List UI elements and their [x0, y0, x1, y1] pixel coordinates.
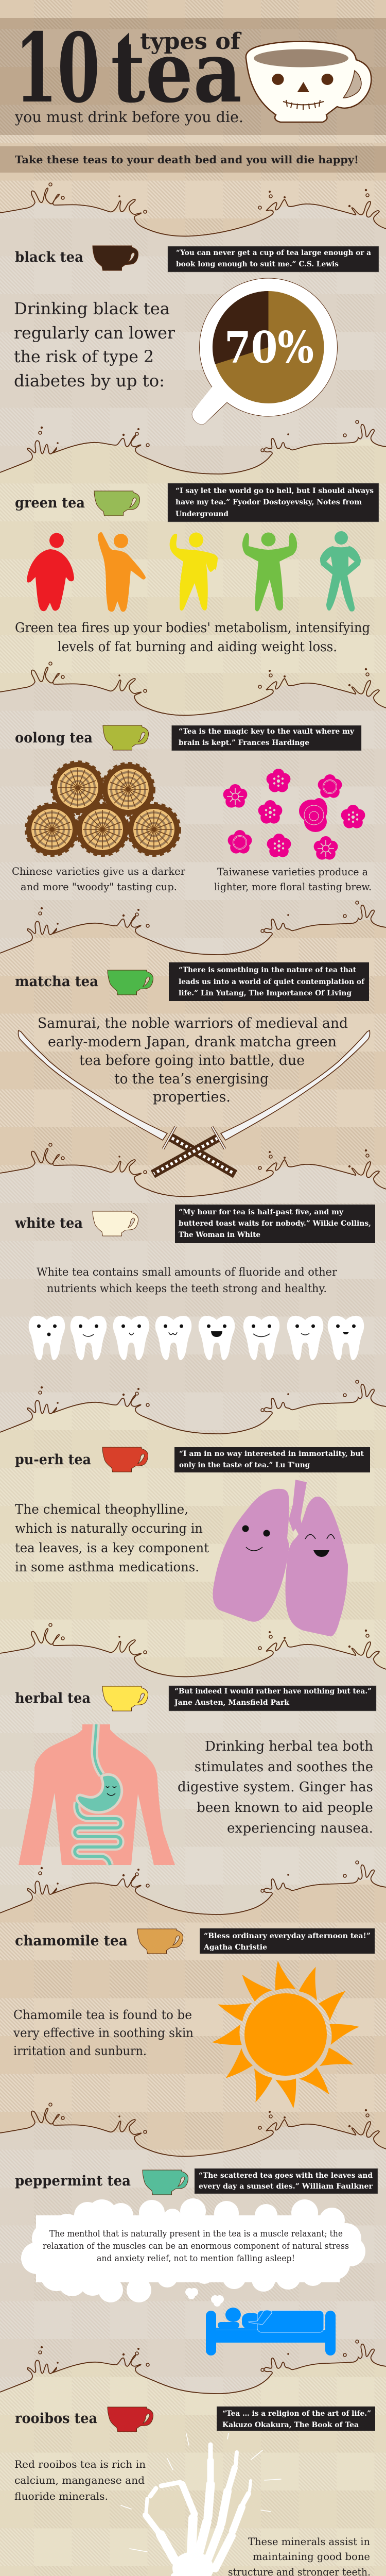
tagline: Take these teas to your death bed and you will die happy! — [15, 154, 359, 166]
body text: levels of fat burning and aiding weight loss. — [58, 639, 337, 655]
text: bones — [228, 2535, 371, 2576]
quote: life.” Lin Yutang, The Importance Of Living — [179, 989, 352, 997]
quote: “The scattered tea goes with the leaves and — [199, 2172, 373, 2180]
quote: Jane Austen, Mansfield Park — [173, 1699, 289, 1707]
heading: rooibos tea — [15, 2411, 97, 2427]
panel: herbal tea — [15, 1686, 376, 1865]
thought cloud — [21, 2198, 365, 2307]
thought cloud: and anxiety relief, not to mention falling asleep! — [97, 2253, 295, 2264]
quote: Agatha Christie — [203, 1943, 267, 1952]
quote: The Woman in White — [179, 1231, 260, 1239]
quote: only in the taste of tea.” Lu T'ung — [179, 1461, 310, 1469]
body text: tea leaves, is a key component — [15, 1540, 209, 1555]
quote: “But indeed I would rather have nothing but tea.” — [174, 1687, 372, 1696]
text: Taiwanese varieties: Taiwanese varieties produce a — [217, 866, 368, 878]
body text: irritation and sunburn. — [13, 2044, 147, 2058]
quote: every day a sunset dies.” William Faulkner — [199, 2182, 373, 2191]
icon: cup — [94, 491, 140, 516]
quote — [175, 1205, 375, 1243]
title: types of — [140, 28, 242, 55]
body text: stimulates and soothes the — [195, 1759, 373, 1775]
icon: cup — [102, 1686, 148, 1711]
thought cloud: relaxation of the muscles can be an enormous component of natural stress — [43, 2241, 349, 2251]
body text: experiencing nausea. — [227, 1821, 373, 1836]
icon: skeleton hand — [121, 2433, 281, 2576]
quote: “There is something in the nature of tea that — [179, 966, 357, 974]
body text: Drinking herbal tea both — [205, 1739, 373, 1754]
quote — [169, 1686, 376, 1711]
quote: Kakuzo Okakura, The Book of Tea — [222, 2421, 359, 2429]
icon: cup — [93, 1211, 138, 1236]
body text — [15, 1502, 209, 1574]
heading: herbal tea — [15, 1690, 91, 1706]
icon: sun — [210, 1959, 361, 2110]
quote: “Tea … is a religion of the art of life.” — [222, 2410, 371, 2418]
panel: black tea — [14, 246, 379, 425]
icon: cup — [108, 2407, 153, 2432]
body text: to the tea’s energising — [114, 1071, 269, 1087]
quote: have my tea.” Fyodor Dostoyevsky, Notes from — [176, 498, 362, 506]
heading: pu-erh tea — [15, 1452, 91, 1468]
icon: crossed katanas — [18, 1030, 370, 1174]
body text: Chamomile tea is found to be — [13, 2008, 192, 2022]
icon: smiling teeth — [29, 1316, 364, 1360]
quote: buttered toast waits for nobody.” Wilkie Collins, — [179, 1219, 371, 1228]
text: Taiwanese varieties — [214, 866, 372, 893]
panel: pu-erh tea — [15, 1447, 370, 1636]
icon: stacked logs — [26, 761, 180, 856]
icon: cup — [93, 246, 138, 270]
chart: 70% pie in a cup: 70% — [224, 322, 314, 373]
quote: leads us into a world of quiet contemplation of — [179, 978, 365, 986]
panel: chamomile tea — [13, 1928, 375, 2110]
body text: regularly can lower — [14, 323, 176, 343]
text: bones: These minerals assist in — [248, 2535, 370, 2548]
text: minerals — [14, 2458, 146, 2502]
icon: cup — [108, 970, 153, 995]
body text: nutrients which keeps the teeth strong and healthy. — [47, 1282, 327, 1295]
heading: black tea — [15, 249, 83, 265]
body text: White tea contains small amounts of fluoride and other — [37, 1266, 338, 1278]
quote — [169, 962, 369, 1001]
heading: matcha tea — [15, 974, 98, 990]
text: Taiwanese varieties: lighter, more floral tasting brew. — [214, 880, 372, 893]
body text — [13, 2008, 194, 2058]
text: bones: maintaining good bone — [253, 2550, 370, 2563]
quote: “I am in no way interested in immortality, but — [179, 1450, 364, 1458]
text: Chinese varieties: Chinese varieties give us a darker — [12, 865, 185, 877]
body text: which is naturally occuring in — [15, 1521, 203, 1536]
body text: been known to aid people — [197, 1800, 373, 1816]
quote — [195, 2168, 378, 2194]
body text: digestive system. Ginger has — [178, 1780, 373, 1795]
heading: oolong tea — [15, 730, 93, 746]
icon: cup — [102, 1447, 148, 1472]
thought cloud: The menthol that is naturally present in the tea is a muscle relaxant; the — [49, 2229, 343, 2239]
text: minerals: Red rooibos tea is rich in — [14, 2458, 146, 2470]
text: Chinese varieties — [12, 865, 185, 893]
body text — [15, 620, 370, 655]
body text — [38, 1015, 348, 1105]
icon: torso with digestive system — [19, 1724, 175, 1865]
body text — [37, 1266, 338, 1295]
heading: white tea — [14, 1215, 83, 1231]
quote — [174, 1447, 370, 1472]
quote — [168, 483, 379, 522]
icon: cup — [143, 2170, 188, 2195]
quote — [200, 1928, 375, 1954]
title: you must drink before you die. — [14, 108, 243, 126]
quote — [172, 725, 361, 751]
icon: smiling lungs — [213, 1480, 348, 1636]
icon: cup — [137, 1929, 183, 1954]
chart: 70% pie in a cup — [192, 278, 338, 425]
heading: chamomile tea — [15, 1933, 128, 1949]
text: minerals: fluoride minerals. — [14, 2490, 108, 2502]
title — [14, 12, 243, 126]
text: minerals: calcium, manganese and — [14, 2474, 145, 2486]
body text — [178, 1739, 373, 1836]
body text: diabetes by up to: — [14, 371, 165, 391]
panel: header — [0, 12, 386, 173]
quote: “Tea is the magic key to the vault where my — [179, 727, 355, 736]
body text: very effective in soothing skin — [13, 2026, 194, 2040]
panel: peppermint tea — [15, 2168, 378, 2355]
quote: “My hour for tea is half-past five, and my — [179, 1208, 344, 1216]
body text: properties. — [153, 1089, 231, 1105]
body text: in some asthma medications. — [15, 1560, 199, 1574]
text: Chinese varieties: and more "woody" tasting cup. — [21, 880, 177, 893]
quote: “Bless ordinary everyday afternoon tea!” — [204, 1932, 371, 1940]
quote: Underground — [176, 510, 229, 518]
panel: oolong tea — [12, 725, 372, 893]
body text: Green tea fires up your bodies' metabolism, intensifying — [15, 620, 370, 636]
title: 10 — [15, 12, 100, 124]
quote: book long enough to suit me.” C.S. Lewis — [176, 260, 339, 268]
panel: white tea — [14, 1205, 375, 1360]
body text: the risk of type 2 — [14, 347, 154, 366]
quote: “I say let the world go to hell, but I should always — [176, 487, 374, 495]
icon: person sleeping in bed — [206, 2308, 336, 2355]
body text: tea before going into battle, due — [79, 1053, 305, 1069]
quote: brain is kept.” Frances Hardinge — [179, 739, 309, 747]
panel: green tea — [15, 483, 379, 655]
title: tea — [111, 23, 242, 122]
body text: early-modern Japan, drank matcha green — [48, 1034, 337, 1050]
icon: cup — [103, 725, 149, 750]
quote: “You can never get a cup of tea large enough or a — [176, 249, 371, 257]
panel: matcha tea — [15, 962, 370, 1174]
icon: pink flowers — [223, 769, 365, 860]
body text: Samurai, the noble warriors of medieval and — [38, 1015, 348, 1031]
quote — [217, 2406, 375, 2431]
heading: peppermint tea — [15, 2173, 131, 2189]
quote — [168, 246, 379, 272]
panel: rooibos tea — [14, 2406, 375, 2576]
body text: Drinking black tea — [14, 299, 170, 318]
figures: weight loss progression — [27, 531, 361, 612]
body text — [14, 299, 176, 391]
heading: green tea — [15, 495, 85, 511]
body text: The chemical theophylline, — [15, 1502, 188, 1517]
icon: skull teacup — [246, 41, 371, 122]
